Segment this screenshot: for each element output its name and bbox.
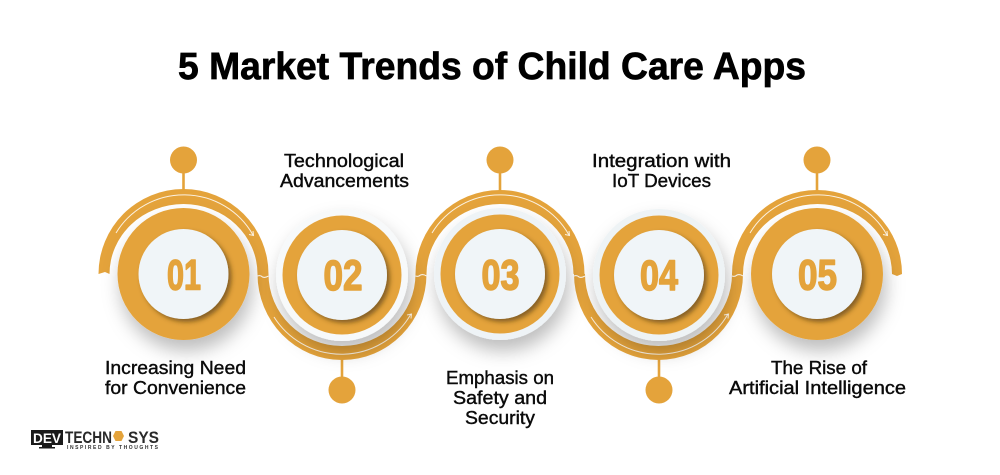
- serpentine ribbon: [98, 189, 902, 360]
- step 01: for Convenience: [105, 378, 246, 398]
- step 03: [434, 146, 566, 428]
- step 03: Security: [465, 408, 535, 428]
- white arc arrows: [116, 195, 888, 354]
- step 04: [592, 151, 731, 404]
- step 01: [105, 146, 250, 398]
- step 05: [729, 146, 906, 398]
- step 03: Emphasis on: [446, 368, 554, 388]
- ribbon joints: [258, 275, 743, 277]
- step 05: Artificial Intelligence: [729, 378, 906, 398]
- step 01: Increasing Need: [105, 358, 246, 378]
- step 02: Advancements: [280, 171, 409, 191]
- step 02: 02: [324, 252, 362, 300]
- logo: Dev Technosys: SYS: [128, 428, 159, 447]
- logo: Dev Technosys: [31, 428, 159, 451]
- step 04: Integration with: [592, 151, 731, 171]
- step 01: 01: [167, 252, 201, 300]
- step 05: The Rise of: [771, 358, 868, 378]
- logo: Dev Technosys: TECHN: [65, 428, 112, 447]
- step 05: 05: [798, 252, 837, 300]
- step 04: 04: [640, 252, 678, 300]
- logo: Dev Technosys: INSPIRED BY THOUGHTS: [67, 445, 159, 451]
- step 03: 03: [482, 252, 520, 300]
- step 04: IoT Devices: [612, 171, 711, 191]
- step 03: Safety and: [453, 388, 547, 408]
- title: 5 Market Trends of Child Care Apps: [178, 46, 806, 88]
- logo: Dev Technosys: DEV: [33, 430, 62, 446]
- step 02: Technological: [284, 151, 404, 171]
- step 02: [276, 151, 409, 404]
